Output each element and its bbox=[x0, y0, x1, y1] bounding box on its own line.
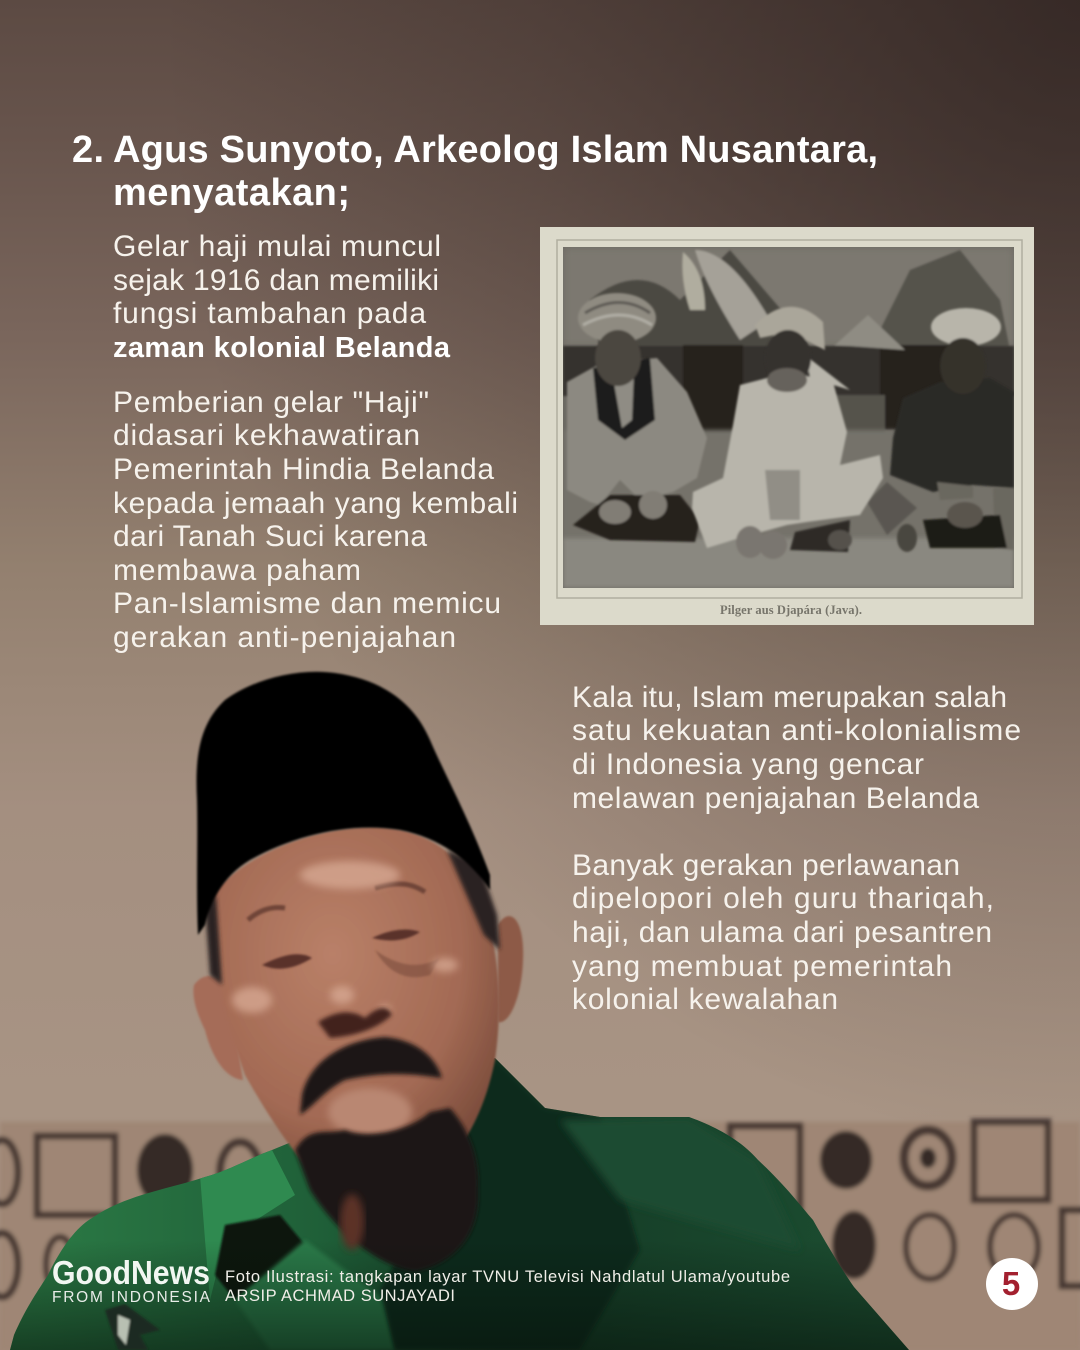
right ear bbox=[498, 916, 523, 1022]
text block: colonial concern: dari Tanah Suci karena bbox=[113, 520, 427, 553]
text block: Islam as anti-colonial force: melawan penjajahan Belanda bbox=[572, 782, 979, 815]
ground bbox=[563, 430, 1014, 540]
photo credit bbox=[225, 1268, 790, 1305]
logo: GoodNews from Indonesia: GoodNews bbox=[52, 1254, 210, 1291]
hair bbox=[205, 850, 500, 985]
nose bbox=[318, 1008, 392, 1038]
text block: origin of the title: sejak 1916 dan memiliki bbox=[113, 264, 439, 297]
photo caption: Pilger aus Djapára (Java). bbox=[720, 603, 862, 617]
text block: colonial concern: gerakan anti-penjajahan bbox=[113, 621, 456, 654]
page number badge: 5 bbox=[1002, 1265, 1020, 1302]
shirt brooch bbox=[105, 1304, 160, 1350]
text block: resistance movements: haji, dan ulama dari pesantren bbox=[572, 916, 992, 949]
moustache and beard bbox=[295, 1037, 478, 1272]
heading bbox=[72, 129, 878, 214]
logo: GoodNews from Indonesia bbox=[52, 1254, 211, 1306]
text block: origin of the title: zaman kolonial Belanda bbox=[113, 332, 451, 364]
text block: colonial concern: Pemberian gelar "Haji" bbox=[113, 386, 429, 419]
photo card bbox=[540, 227, 1034, 625]
eyes and brows bbox=[248, 884, 440, 977]
text block: resistance movements bbox=[572, 849, 994, 1016]
right pilgrim bbox=[867, 308, 1014, 552]
man in green shirt and black cap bbox=[0, 672, 920, 1350]
text block: origin of the title: fungsi tambahan pada bbox=[113, 297, 426, 330]
black cap bbox=[197, 672, 490, 935]
lower shirt shade bbox=[10, 1253, 909, 1350]
text block: colonial concern: Pemerintah Hindia Belanda bbox=[113, 453, 494, 486]
text block: resistance movements: Banyak gerakan perlawanan bbox=[572, 849, 960, 882]
left ear bbox=[193, 976, 243, 1080]
text block: resistance movements: yang membuat pemerintah bbox=[572, 950, 952, 983]
photo credit: Foto Ilustrasi: tangkapan layar TVNU Televisi Nahdlatul Ulama/youtube bbox=[225, 1268, 790, 1286]
green shirt bbox=[0, 1050, 920, 1350]
text block: origin of the title: Gelar haji mulai muncul bbox=[113, 230, 441, 263]
wall pattern band bbox=[0, 1122, 1080, 1350]
heading: menyatakan; bbox=[113, 172, 350, 214]
photo credit: ARSIP ACHMAD SUNJAYADI bbox=[225, 1287, 455, 1305]
backdrop foliage bbox=[563, 250, 1014, 435]
page number badge bbox=[986, 1258, 1038, 1310]
text block: Islam as anti-colonial force: satu kekuatan anti-kolonialisme bbox=[572, 714, 1021, 747]
logo: GoodNews from Indonesia: FROM INDONESIA bbox=[52, 1289, 211, 1306]
text block: Islam as anti-colonial force: di Indonesia yang gencar bbox=[572, 748, 924, 781]
text block: resistance movements: kolonial kewalahan bbox=[572, 983, 838, 1016]
lower lip and chin bbox=[328, 1088, 412, 1136]
face bbox=[212, 827, 499, 1190]
framed historic photo bbox=[540, 227, 1034, 625]
text block: colonial concern: kepada jemaah yang kembali bbox=[113, 487, 518, 520]
heading: 2. bbox=[72, 129, 104, 171]
facial highlights bbox=[232, 861, 458, 1015]
text block: Islam as anti-colonial force bbox=[572, 681, 1021, 815]
middle pilgrim bbox=[692, 307, 883, 559]
text block: colonial concern: didasari kekhawatiran bbox=[113, 419, 420, 452]
photograph of three pilgrims bbox=[563, 247, 1014, 588]
text block: colonial concern: membawa paham bbox=[113, 554, 361, 587]
text block: colonial concern: Pan-Islamisme dan memicu bbox=[113, 587, 501, 620]
beard reddish tone bbox=[340, 1194, 364, 1250]
text block: resistance movements: dipelopori oleh guru thariqah, bbox=[572, 882, 994, 915]
text block: Islam as anti-colonial force: Kala itu, Islam merupakan salah bbox=[572, 681, 1007, 714]
heading: Agus Sunyoto, Arkeolog Islam Nusantara, bbox=[113, 129, 878, 171]
left pilgrim bbox=[567, 293, 707, 542]
text block: origin of the title bbox=[113, 230, 451, 364]
inner frame line bbox=[557, 240, 1022, 598]
text block: colonial concern bbox=[113, 386, 518, 654]
